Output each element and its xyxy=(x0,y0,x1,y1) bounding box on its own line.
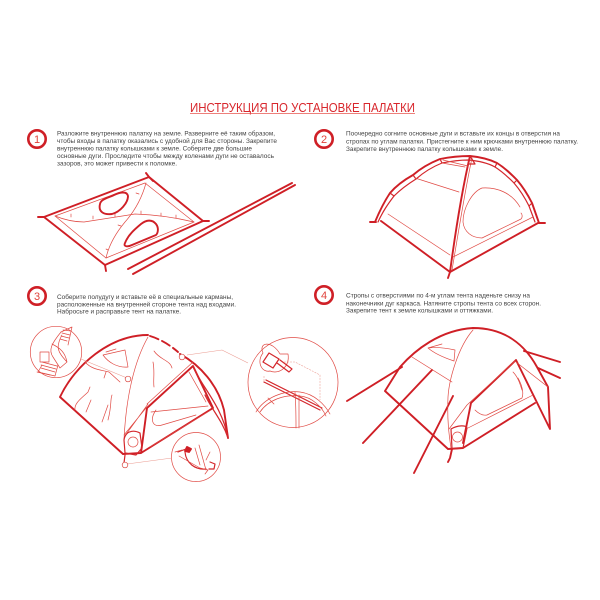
detail: webbing loop xyxy=(30,326,82,378)
step 4 text: наконечники дуг каркаса. Натяните стропы тента со всех сторон. xyxy=(346,300,541,307)
step 1 text: основные дуги. Проследите чтобы между коленами дуги не оставалось xyxy=(57,152,275,160)
step 3 text: расположенные на внутренней стороне тента над входами. xyxy=(57,300,236,308)
step 2 text xyxy=(346,130,578,153)
illustration: tent with pole frame xyxy=(370,156,545,278)
step 4 number badge: 4 xyxy=(321,290,327,302)
illustration: tent with flysheet xyxy=(60,335,228,463)
step 4 text xyxy=(346,292,541,314)
step 2 text: Закрепите внутреннюю палатку колышками к земле. xyxy=(346,146,503,153)
pole windows xyxy=(100,192,128,214)
panel: step 4 xyxy=(315,286,560,473)
step 1 text: внутреннюю палатку колышками к земле. Соберите две большие xyxy=(57,145,252,153)
step 1 text xyxy=(57,130,277,167)
step 3 text: Соберите полудугу и вставьте её в специальные карманы, xyxy=(57,293,233,301)
step 4 text: Закрепите тент к земле колышками и оттяжками. xyxy=(346,308,493,314)
step 1 text: Разложите внутреннюю палатку на земле. Разверните её таким образом, xyxy=(57,130,275,138)
panel: step 3 xyxy=(28,287,338,482)
illustration: pitched tent with guy lines xyxy=(347,328,560,473)
step 4 number badge xyxy=(315,286,333,304)
illustration: tent laid flat with poles xyxy=(38,173,295,274)
step 3 number badge: 3 xyxy=(34,291,40,303)
detail: peg and hook xyxy=(172,432,220,482)
detail: pole end fitting xyxy=(248,338,338,428)
step 1 number badge xyxy=(28,130,46,148)
guy lines xyxy=(347,351,560,473)
step 3 text xyxy=(57,293,236,316)
step 2 text: стропах по углам палатки. Пристегните к ним крючками внутреннюю палатку. xyxy=(346,138,578,145)
panel: step 1 xyxy=(28,130,295,274)
step 1 number badge: 1 xyxy=(34,134,40,146)
step 2 number badge xyxy=(315,130,333,148)
step 2 text: Поочередно согните основные дуги и вставьте их концы в отверстия на xyxy=(346,130,560,137)
panel: step 2 xyxy=(315,130,578,278)
title: ИНСТРУКЦИЯ ПО УСТАНОВКЕ ПАЛАТКИ xyxy=(190,100,415,115)
step 2 number badge: 2 xyxy=(321,134,327,146)
step 4 text: Стропы с отверстиями по 4-м углам тента наденьте снизу на xyxy=(346,292,530,300)
step 1 text: чтобы входы в палатку оказались с удобной для Вас стороны. Закрепите xyxy=(57,137,277,145)
poles xyxy=(128,183,292,269)
step 3 text: Набросьте и расправьте тент на палатке. xyxy=(57,308,181,316)
front vent and guy peg xyxy=(124,431,142,455)
step 1 text: зазоров, это может привести к поломке. xyxy=(57,160,177,167)
step 3 number badge xyxy=(28,287,46,305)
leader lines xyxy=(81,350,248,468)
